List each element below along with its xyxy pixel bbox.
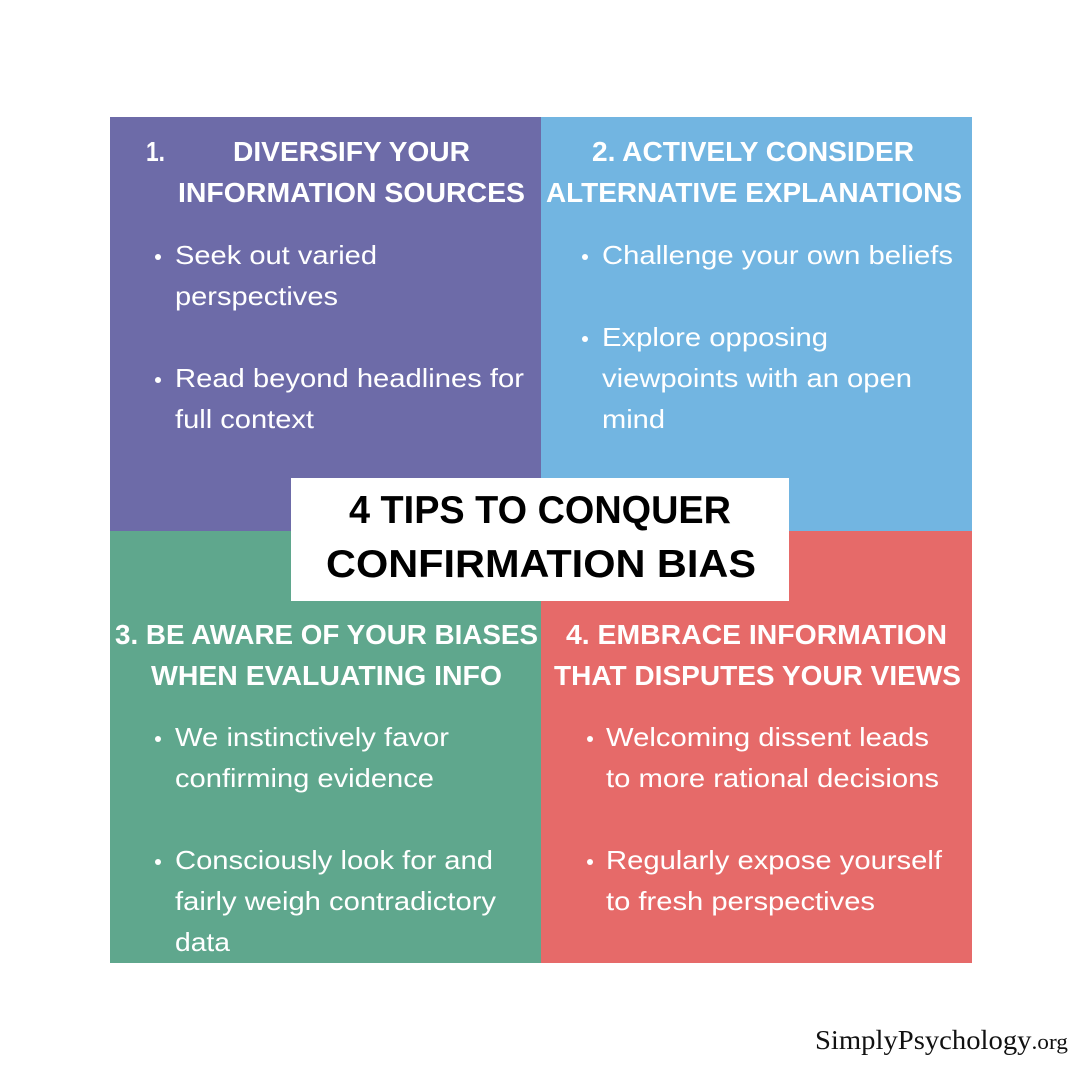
bullets 4 [587, 722, 943, 916]
heading 4 [554, 619, 961, 691]
bullets 3: data [175, 927, 231, 957]
title box: CONFIRMATION BIAS [326, 543, 756, 586]
heading 1: DIVERSIFY YOUR [233, 136, 470, 167]
bullets 3 [155, 722, 496, 957]
bullets 3: We instinctively favor [175, 722, 449, 752]
title box [291, 478, 789, 601]
panel: 4 embrace disputing info [541, 531, 972, 963]
bullets 4: Regularly expose yourself [606, 845, 943, 875]
heading 3 [115, 619, 538, 691]
bullets 4: to fresh perspectives [606, 886, 875, 916]
bullets 3: confirming evidence [175, 763, 434, 793]
bullets 1: perspectives [175, 281, 338, 311]
heading 2 [546, 136, 962, 208]
panel: 2 consider alternatives [541, 117, 972, 531]
heading 2: ALTERNATIVE EXPLANATIONS [546, 177, 962, 208]
heading 1: INFORMATION SOURCES [178, 177, 525, 208]
bullets 2 [582, 240, 953, 434]
bullets 2: Challenge your own beliefs [602, 240, 953, 270]
heading 4: THAT DISPUTES YOUR VIEWS [554, 660, 961, 691]
heading 2: 2. ACTIVELY CONSIDER [592, 136, 914, 167]
heading 1 [146, 136, 525, 208]
bullets 1: Read beyond headlines for [175, 363, 524, 393]
bullets 2: viewpoints with an open [602, 363, 912, 393]
heading 3: 3. BE AWARE OF YOUR BIASES [115, 619, 538, 650]
footer credit: SimplyPsychology .org [815, 1025, 1068, 1055]
bullets 2: Explore opposing [602, 322, 828, 352]
bullets 1: Seek out varied [175, 240, 377, 270]
panel: 3 aware of biases [110, 531, 541, 963]
bullets 3: fairly weigh contradictory [175, 886, 496, 916]
bullets 1 [155, 240, 524, 434]
title box: 4 TIPS TO CONQUER [349, 489, 731, 532]
heading 4: 4. EMBRACE INFORMATION [566, 619, 947, 650]
bullets 4: to more rational decisions [606, 763, 939, 793]
bullets 2: mind [602, 404, 665, 434]
heading 1: 1. [146, 136, 165, 167]
panel: 1 diversify sources [110, 117, 541, 531]
bullets 1: full context [175, 404, 315, 434]
heading 3: WHEN EVALUATING INFO [151, 660, 502, 691]
bullets 4: Welcoming dissent leads [606, 722, 929, 752]
bullets 3: Consciously look for and [175, 845, 493, 875]
